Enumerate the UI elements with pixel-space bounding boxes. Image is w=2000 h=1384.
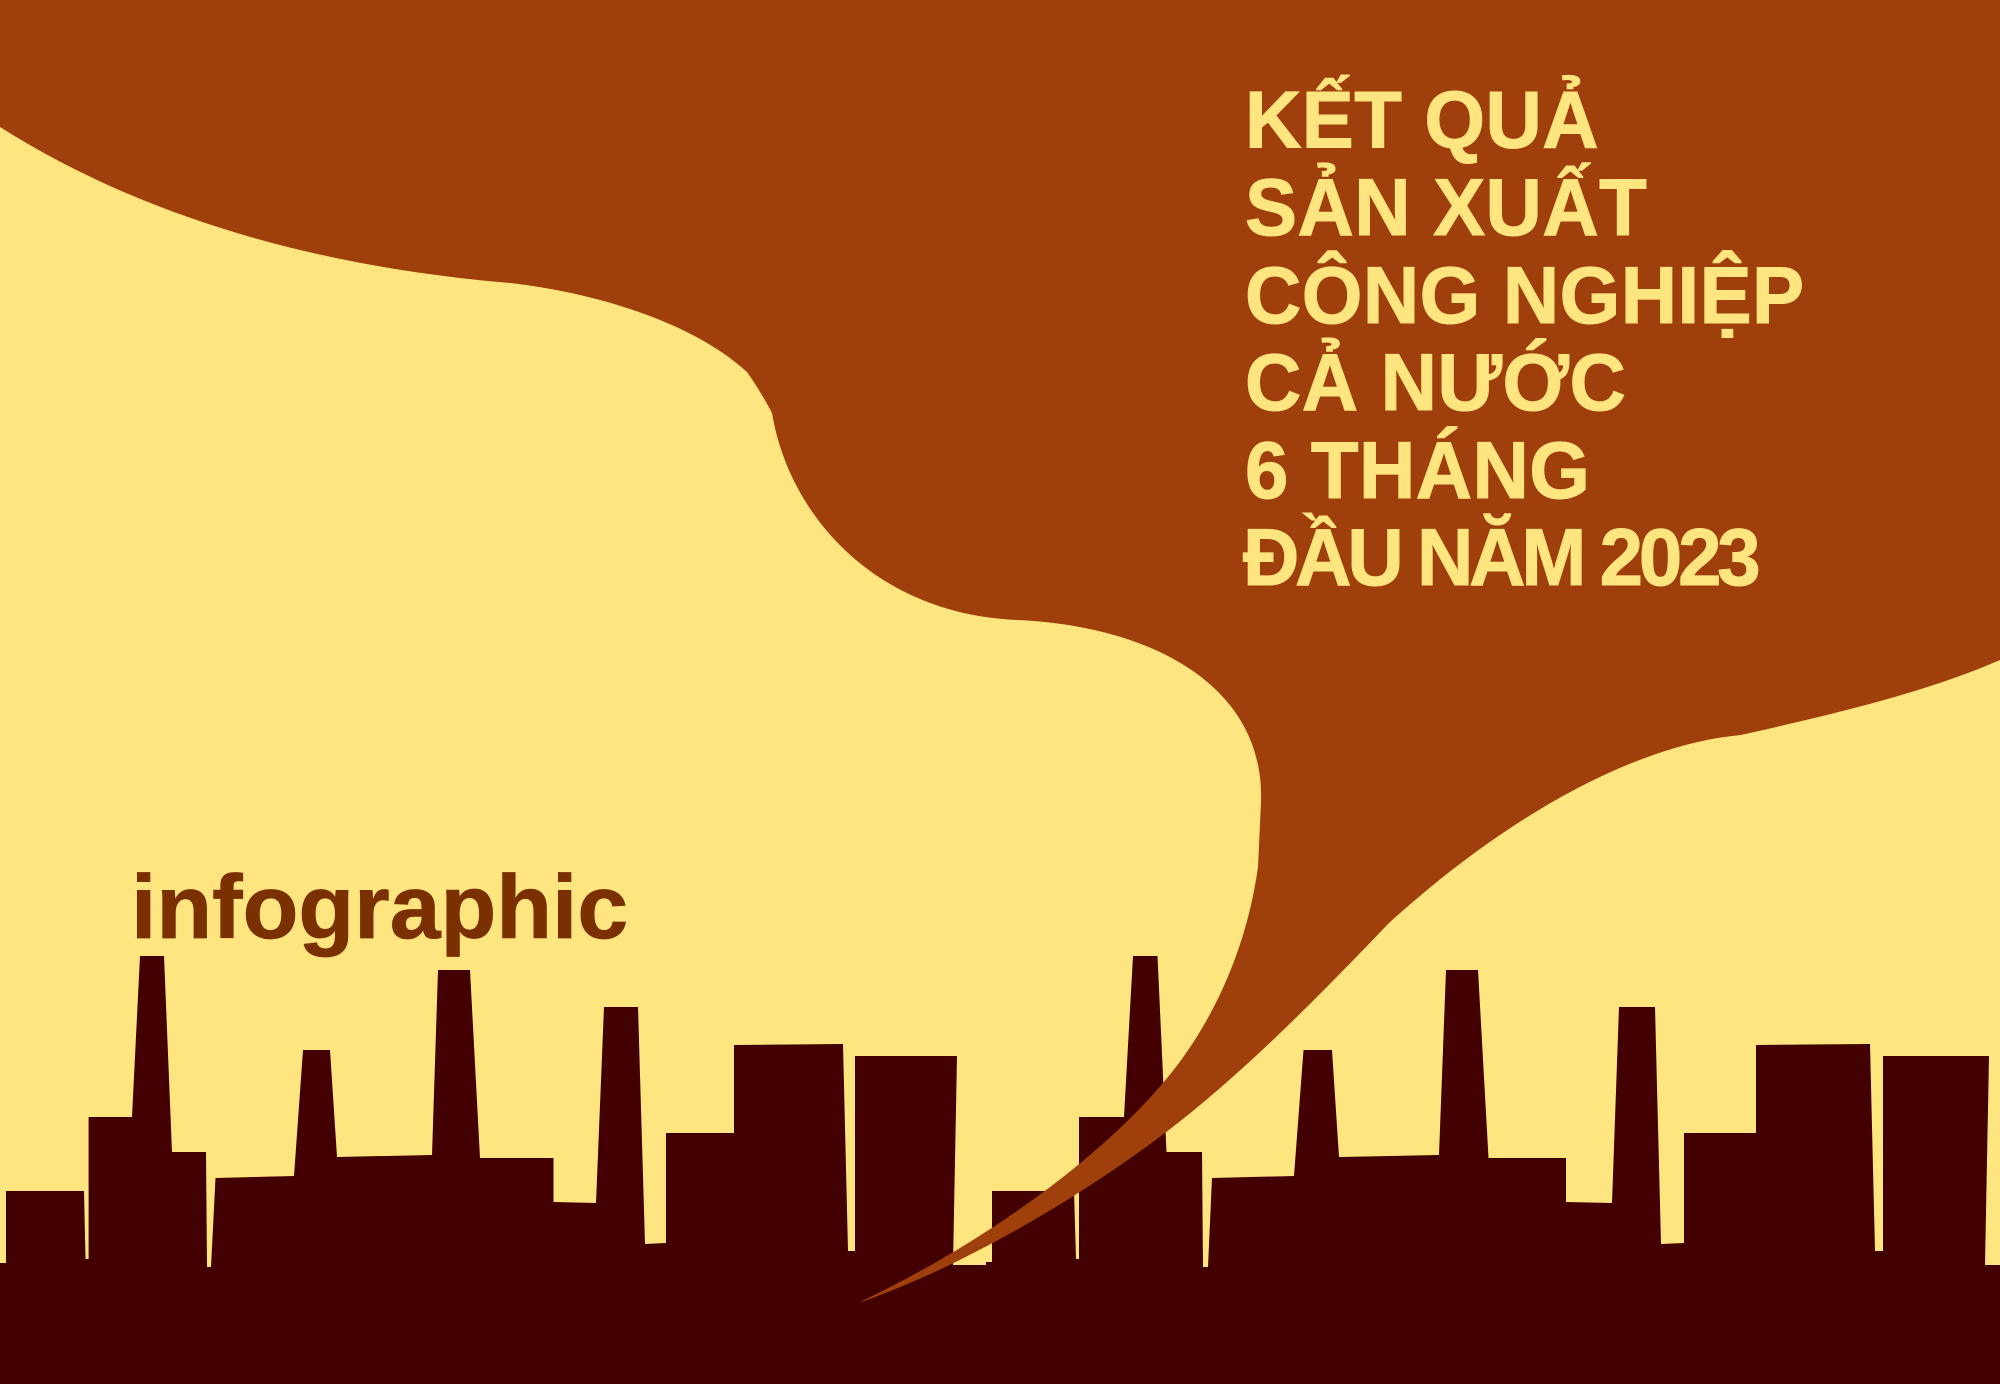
title: 6 THÁNG <box>1245 425 1590 515</box>
title: SẢN XUẤT <box>1245 162 1647 252</box>
factory skyline silhouette <box>0 956 2000 1384</box>
title: CẢ NƯỚC <box>1245 337 1626 427</box>
title: CÔNG NGHIỆP <box>1245 250 1805 340</box>
title: KẾT QUẢ <box>1245 74 1599 165</box>
title <box>1243 74 1805 602</box>
infographic label: infographic <box>131 858 628 958</box>
title: ĐẦU NĂM 2023 <box>1243 512 1759 602</box>
